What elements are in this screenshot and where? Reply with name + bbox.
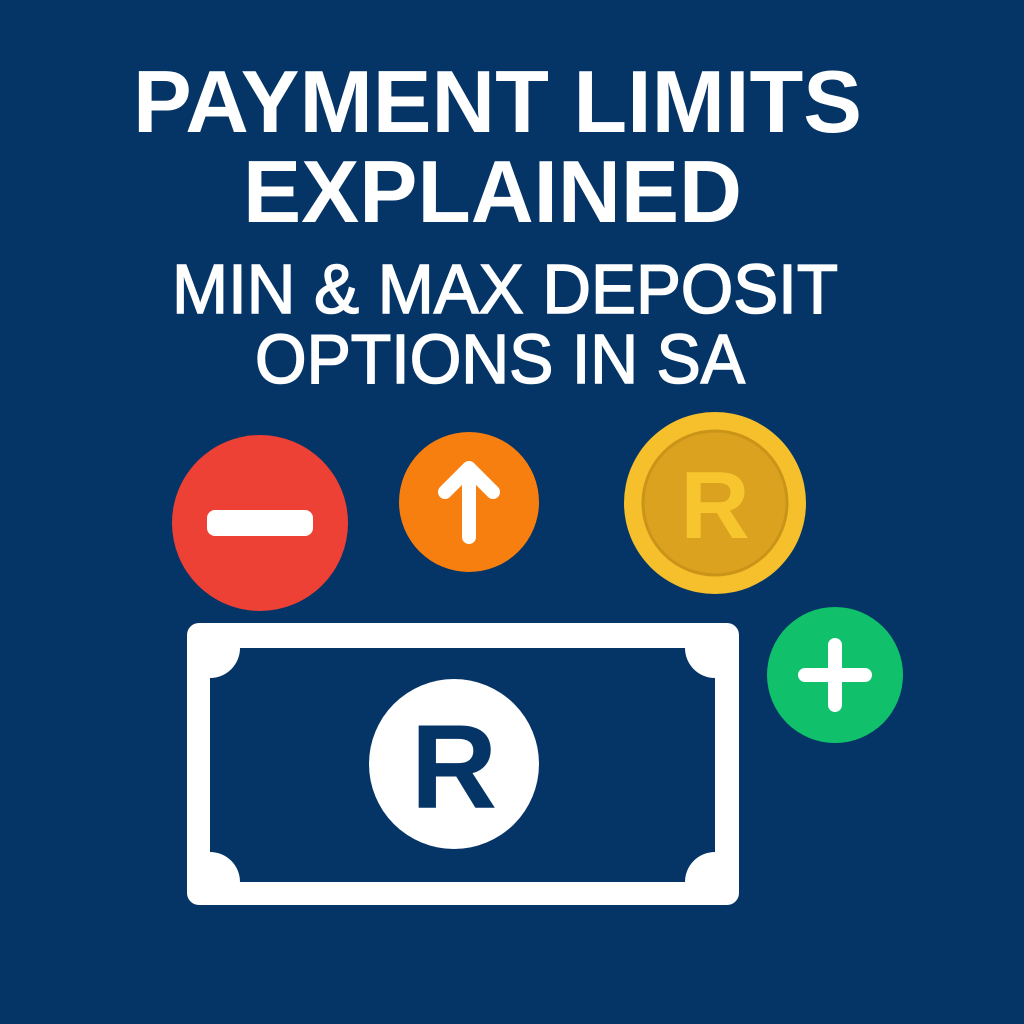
subtitle (172, 250, 838, 398)
banknote rand symbol: R (411, 700, 497, 834)
title: EXPLAINED (243, 142, 742, 241)
icon: gold rand coin (624, 412, 806, 594)
icon: gold rand coin: R (680, 452, 750, 559)
subtitle: MIN & MAX DEPOSIT (172, 250, 838, 328)
banknote rand symbol (369, 679, 539, 849)
subtitle: OPTIONS IN SA (255, 320, 745, 398)
title: PAYMENT LIMITS (133, 52, 862, 151)
icon: green plus (767, 607, 903, 743)
icon: red minus (172, 435, 348, 611)
banknote (187, 623, 739, 905)
title (133, 52, 862, 241)
icon: orange up arrow (399, 432, 539, 572)
